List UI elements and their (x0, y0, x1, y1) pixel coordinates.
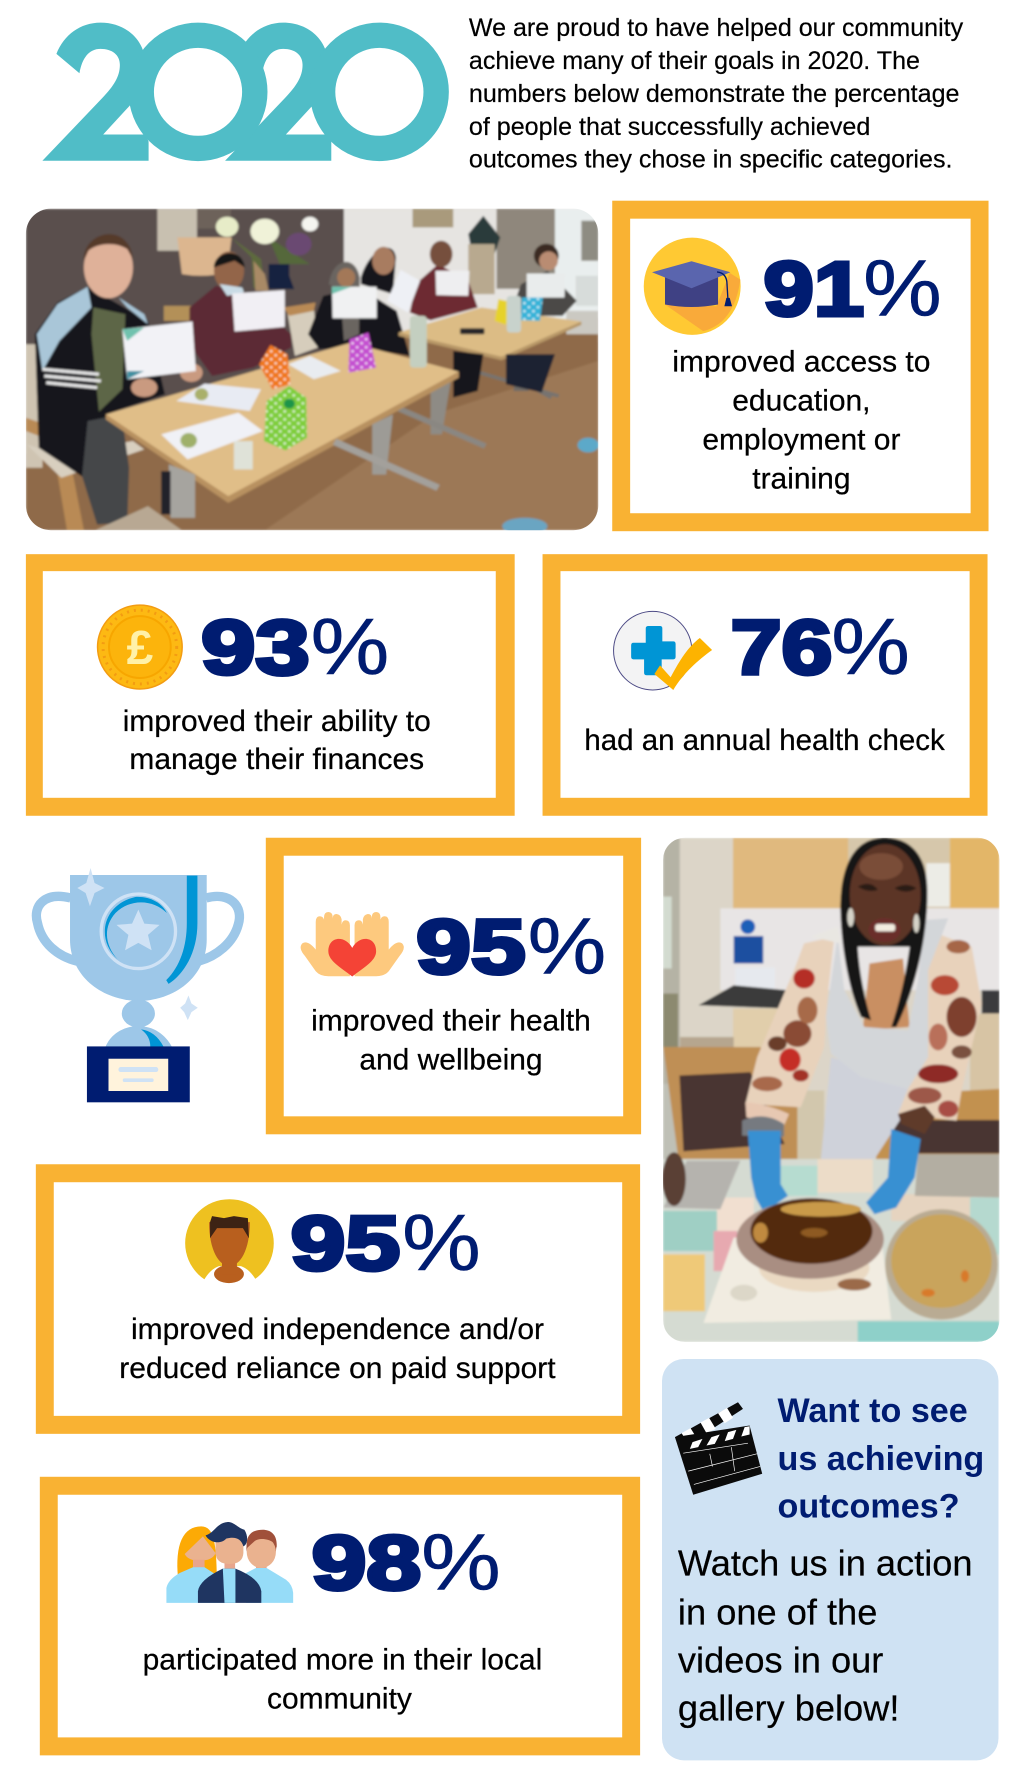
stat: 76%: % (831, 602, 910, 691)
wrists (745, 1102, 789, 1126)
panel: 76% health check (543, 554, 988, 816)
stat: 91%: % (863, 243, 942, 333)
heading: want to see (777, 1392, 984, 1526)
stat: 95% (291, 1198, 481, 1287)
chest and apron (863, 958, 910, 1030)
panel: 95% independence (36, 1164, 640, 1434)
photo: group holding certificates (26, 208, 598, 530)
panel: 91% education (612, 201, 989, 531)
icon: graduation cap (644, 238, 741, 335)
stat: 98% (312, 1518, 501, 1607)
text: independence: improved independence and/or (131, 1313, 544, 1346)
certificates (122, 322, 196, 379)
text: watch us: in one of the (678, 1592, 877, 1633)
man front (35, 287, 165, 478)
text: watch us: videos in our (678, 1639, 883, 1680)
panel: 93% finances (26, 554, 515, 816)
sleeves (745, 937, 834, 1107)
gloves (748, 1131, 788, 1213)
text: community: participated more in their local (143, 1643, 542, 1677)
icon: hands and heart (301, 912, 404, 977)
text: wellbeing: and wellbeing (359, 1043, 543, 1076)
chairs (663, 1047, 797, 1159)
text: education: training (752, 462, 851, 495)
table (663, 1159, 999, 1342)
stat: 76% (731, 602, 910, 691)
text: watch us: gallery below! (678, 1687, 899, 1728)
text: independence (119, 1313, 556, 1385)
intro text (469, 14, 964, 174)
stat: 93%: 93 (201, 606, 310, 691)
panel: video callout (662, 1359, 998, 1760)
people back row (510, 271, 577, 316)
text: finances (123, 705, 431, 776)
stat: 98%: 98 (312, 1522, 421, 1607)
intro text: outcomes they chose in specific categories. (469, 146, 952, 174)
panel: 95% health and wellbeing (266, 838, 641, 1134)
photo: woman with baked dish (663, 838, 1000, 1342)
logo: 2020 (42, 23, 436, 161)
icon: pound coin (98, 605, 182, 689)
hair (840, 838, 927, 1027)
gift bags (259, 345, 290, 389)
icon: trophy (36, 868, 239, 1102)
text: health check: had an annual health check (584, 724, 945, 757)
text: watch us: Watch us in action (678, 1543, 973, 1584)
text: education (672, 345, 930, 495)
heading: want to see: us achieving (777, 1440, 984, 1478)
face (850, 844, 921, 946)
intro text: achieve many of their goals in 2020. The (469, 47, 920, 75)
text: wellbeing (311, 1004, 591, 1076)
text: community: community (267, 1682, 412, 1715)
icon: medical cross and tick (614, 611, 712, 690)
intro text: We are proud to have helped our community (469, 14, 964, 42)
icon: three people (166, 1522, 293, 1603)
icon: film clapperboard (675, 1402, 762, 1495)
panel: 98% community (40, 1477, 640, 1755)
papers (161, 413, 263, 459)
stat: 95% (416, 901, 606, 991)
heading: want to see: outcomes? (777, 1488, 960, 1526)
intro text: numbers below demonstrate the percentage (469, 80, 959, 108)
stat: 93% (201, 602, 389, 691)
text: finances: improved their ability to (123, 705, 431, 738)
baked dish (758, 1264, 870, 1292)
stat: 95%: 95 (291, 1202, 400, 1287)
tables (399, 308, 581, 357)
text: community (143, 1643, 542, 1715)
text: watch us (678, 1543, 973, 1728)
stat: 95%: % (528, 901, 606, 991)
icon: pound coin: £ (127, 622, 154, 675)
apron lower (820, 1058, 908, 1160)
text: wellbeing: improved their health (311, 1004, 591, 1037)
intro text: of people that successfully achieved (469, 113, 870, 141)
stat: 98%: % (421, 1518, 501, 1607)
heading: want to see: Want to see (777, 1392, 968, 1430)
stat: 93%: % (311, 602, 389, 691)
stat: 76%: 76 (731, 606, 832, 691)
text: education: education, (732, 384, 870, 417)
rice dish (885, 1209, 998, 1320)
text: education: employment or (702, 423, 900, 456)
text: education: improved access to (672, 345, 930, 378)
text: finances: manage their finances (129, 743, 424, 776)
stat: 91% (764, 243, 942, 333)
stat: 95%: % (402, 1198, 481, 1287)
stat: 91%: 91 (764, 247, 864, 333)
icon: person avatar (179, 1199, 279, 1290)
stat: 95%: 95 (416, 905, 526, 991)
text: independence: reduced reliance on paid support (119, 1352, 556, 1385)
